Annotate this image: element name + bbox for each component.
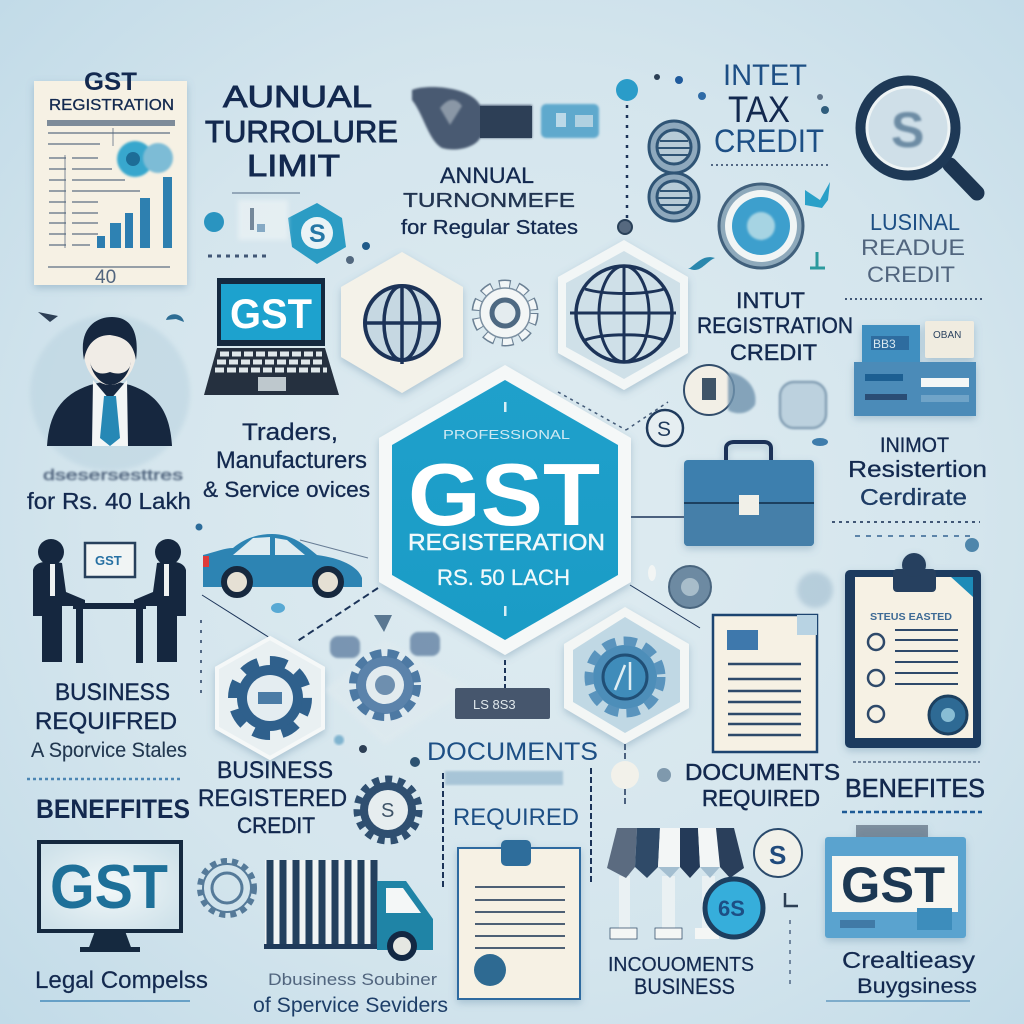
text: documents required center: DOCUMENTS xyxy=(427,738,598,766)
text: business registered credit: REGISTERED xyxy=(198,785,347,812)
icon: certificate xyxy=(458,840,580,999)
icon: shop with seal xyxy=(607,828,763,939)
icon: clipboard checklist xyxy=(845,553,981,748)
text: annual turnover for regular states: ANNUAL xyxy=(440,163,534,188)
central registration label: REGISTERATION xyxy=(408,529,605,555)
label: dark tag xyxy=(455,688,550,719)
text: documents required center: REQUIRED xyxy=(453,804,579,831)
text: business or service providers xyxy=(253,970,448,1017)
report subtitle: REGISTRATION xyxy=(49,97,174,114)
text: annual turnover for regular states xyxy=(401,163,578,239)
icon: bank cards stack xyxy=(854,321,976,416)
text: incoming documents business: BUSINESS xyxy=(634,974,735,999)
text: lusinal reabue credit xyxy=(861,209,965,287)
text: documents required right: REQUIRED xyxy=(702,785,820,811)
heading: input tax credit xyxy=(714,59,824,159)
text: input registration credit: INTUT xyxy=(736,288,805,313)
central GST: GST xyxy=(408,445,600,544)
icon: gear hexagon xyxy=(217,638,323,758)
text: business required: A Sporvice Stales xyxy=(31,739,187,762)
text: business registered credit xyxy=(198,757,347,838)
icon: magnifying glass with S: S xyxy=(891,102,924,158)
icon: S gear xyxy=(200,861,254,915)
icon: two businessmen at table xyxy=(33,539,186,663)
icon: gear blue xyxy=(325,640,470,745)
icon: GST laptop xyxy=(204,278,339,395)
card label: OBAN xyxy=(933,330,961,341)
text: initial registration certificate: Resistertion xyxy=(848,456,987,482)
text: legal compliance: Legal Compelss xyxy=(35,967,208,994)
icon: briefcase xyxy=(684,442,814,546)
panel: central GST hexagon xyxy=(379,365,631,655)
text: credit easy business: Buygsiness xyxy=(857,975,977,998)
central amount: RS. 50 LACH xyxy=(437,565,570,590)
icon: stacked coins xyxy=(649,121,699,221)
icon: magnifying glass with S xyxy=(861,81,977,193)
label: dark tag: LS 8S3 xyxy=(473,697,516,712)
text: blurred caption: dsesersesttres xyxy=(43,467,183,484)
text: documents required center xyxy=(427,738,598,831)
text: business registered credit: CREDIT xyxy=(237,813,315,838)
card code: BB3 xyxy=(873,337,896,351)
icon: handshake and card xyxy=(412,87,599,150)
text: business or service providers: of Spervice Seviders xyxy=(253,994,448,1017)
text: lusinal reabue credit: READUE xyxy=(861,235,965,260)
icon: document xyxy=(713,615,817,752)
heading: annual turnover limit xyxy=(205,79,398,183)
icon: dollar coin: S xyxy=(769,840,786,870)
icon: small round glyphs xyxy=(330,615,440,658)
text: input registration credit xyxy=(697,288,853,365)
text: input registration credit: REGISTRATION xyxy=(697,313,853,338)
text: business registered credit: BUSINESS xyxy=(217,757,333,784)
report figure: 40 xyxy=(95,267,116,288)
heading: annual turnover limit: TURROLURE xyxy=(205,114,398,149)
report lines and bars xyxy=(47,120,175,267)
icon: S badge: S xyxy=(309,220,326,248)
icon: globe hexagon left xyxy=(341,252,463,393)
heading: benefits right: BENEFITES xyxy=(845,773,985,803)
text: documents required right xyxy=(685,759,840,811)
text: business required: REQUIFRED xyxy=(35,708,177,735)
panel: registration report xyxy=(34,68,187,288)
icon: blue seal xyxy=(719,184,803,268)
icon: dollar coin xyxy=(754,829,802,877)
laptop keyboard xyxy=(215,354,327,370)
text: credit easy business xyxy=(842,947,977,998)
icon: decorative splash xyxy=(688,182,830,270)
text: business or service providers: Dbusiness Soubiner xyxy=(268,970,437,989)
report heading: GST xyxy=(84,68,137,96)
text: initial registration certificate xyxy=(848,434,987,510)
text: incoming documents business xyxy=(608,954,754,999)
icon: shop with seal: 6S xyxy=(718,896,745,921)
text: incoming documents business: INCOUOMENTS xyxy=(608,954,754,976)
icon: person in suit xyxy=(30,315,190,471)
text: credit easy business: Crealtieasy xyxy=(842,947,976,973)
clipboard seal xyxy=(929,696,967,734)
text: annual turnover for regular states: TURNONMEFE xyxy=(403,190,575,212)
text: annual turnover for regular states: for Regular States xyxy=(401,217,578,239)
text: input registration credit: CREDIT xyxy=(730,340,817,365)
text: traders manufacturers service: Manufacturers xyxy=(216,447,367,474)
icon: GST card xyxy=(825,825,966,938)
text: traders manufacturers service: & Service ovices xyxy=(203,477,370,502)
icon: location pin xyxy=(616,74,829,234)
icon: blue car xyxy=(203,534,362,595)
laptop GST label: GST xyxy=(230,290,312,337)
icon: small dots near badge xyxy=(204,200,370,264)
heading: input tax credit: CREDIT xyxy=(714,123,824,159)
icons: scattered glyphs left xyxy=(38,312,979,906)
icons: small round tokens: S xyxy=(657,418,671,441)
monitor GST: GST xyxy=(50,853,168,922)
text: lusinal reabue credit: CREDIT xyxy=(867,262,955,287)
central kicker: PROFESSIONAL xyxy=(443,427,570,442)
icon: delivery truck xyxy=(264,860,433,958)
card GST: GST xyxy=(841,857,945,913)
text: business required xyxy=(31,679,187,762)
text: for Rs 40 lakh: for Rs. 40 Lakh xyxy=(27,488,191,514)
icon: central cog xyxy=(477,285,533,341)
icon: globe hexagon right xyxy=(558,240,688,390)
text: documents required right: DOCUMENTS xyxy=(685,759,840,785)
clipboard heading: STEUS EASTED xyxy=(870,612,952,623)
heading: input tax credit: INTET xyxy=(723,59,807,92)
text: business required: BUSINESS xyxy=(55,679,170,706)
text: lusinal reabue credit: LUSINAL xyxy=(870,209,960,235)
seal badge xyxy=(705,879,763,937)
icon: S badge xyxy=(288,203,346,264)
icons: small round tokens xyxy=(611,365,833,789)
monitor text: GST xyxy=(95,553,122,568)
text: traders manufacturers service xyxy=(203,419,370,502)
heading: annual turnover limit: AUNUAL xyxy=(223,79,372,114)
heading: annual turnover limit: LIMIT xyxy=(247,148,340,183)
text: initial registration certificate: Cerdirate xyxy=(860,484,967,510)
heading: input tax credit: TAX xyxy=(728,89,790,130)
text: initial registration certificate: INIMOT xyxy=(880,434,949,457)
text: traders manufacturers service: Traders, xyxy=(242,419,338,446)
icon: dark gear xyxy=(357,779,419,841)
heading: benefits left: BENEFFITES xyxy=(36,794,190,824)
icon: dark gear: S xyxy=(381,800,394,822)
icon: GST monitor xyxy=(39,842,181,952)
icon: gear hexagon right xyxy=(564,607,689,744)
